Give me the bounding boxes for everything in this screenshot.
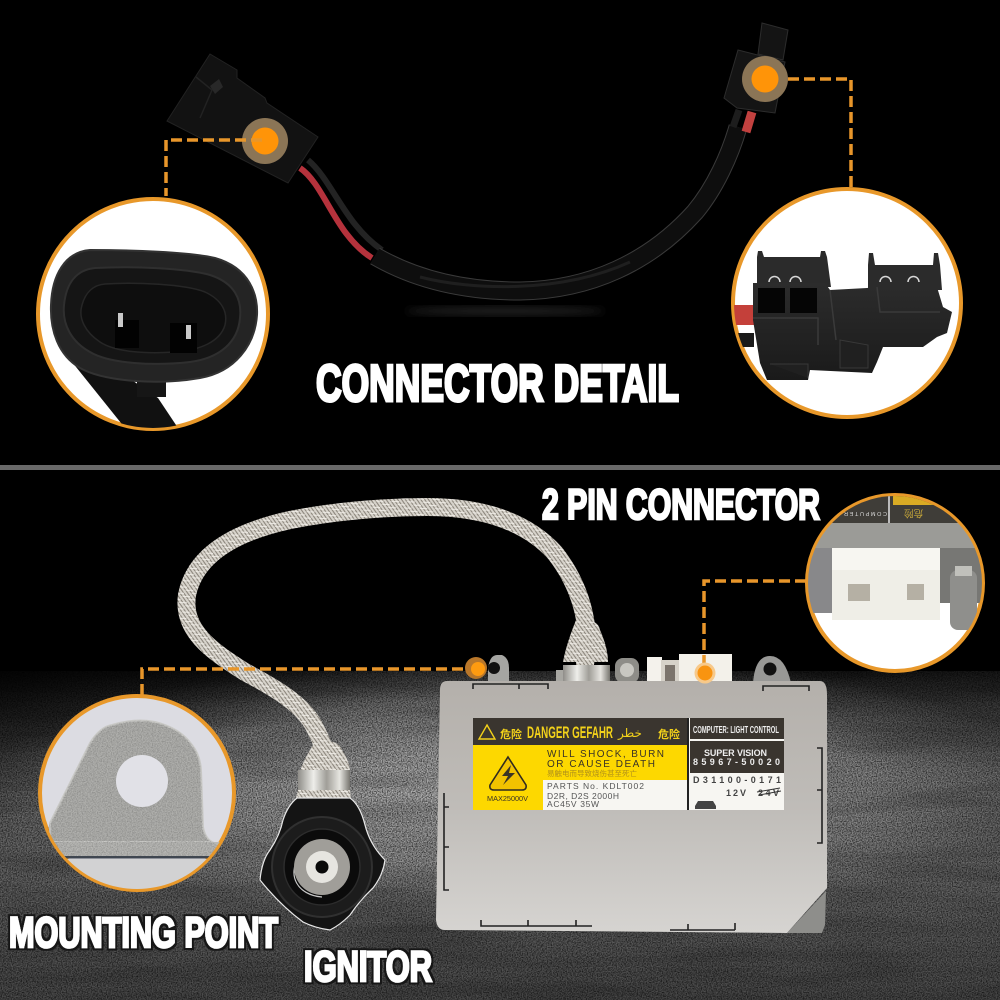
yellow warning label: 易触电而导致烧伤甚至死亡 <box>547 768 638 778</box>
cable sheath <box>375 127 738 291</box>
yellow warning label: AC45V 35W <box>547 799 599 809</box>
wiring harness <box>300 110 752 316</box>
yellow warning label: DANGER GEFAHR <box>527 723 613 742</box>
marker: right plug <box>742 56 788 102</box>
dashed leader: left plug <box>166 140 262 196</box>
braid ferrule <box>556 665 610 683</box>
marker: left plug <box>242 118 288 164</box>
yellow warning label: OR CAUSE DEATH <box>547 759 655 770</box>
label: 2 pin connector: 2 PIN CONNECTOR <box>542 481 820 529</box>
yellow warning label: خطر <box>617 726 642 741</box>
panel: floor background <box>0 671 1000 1000</box>
product label: COMPUTER: LIGHT CONTROL <box>693 725 779 736</box>
marker: mounting point <box>465 657 487 679</box>
white connector <box>647 654 732 683</box>
red wire right <box>746 112 752 132</box>
product label: D31100-0171 <box>693 775 781 785</box>
dashed leader: 2 pin connector <box>704 581 806 665</box>
label: mounting point: MOUNTING POINT <box>9 909 278 957</box>
cable glow <box>405 306 605 316</box>
dashed leader: right plug <box>788 79 851 187</box>
yellow warning label <box>473 718 689 810</box>
control module <box>436 654 827 933</box>
ignitor <box>260 770 385 930</box>
braided cable <box>186 507 608 772</box>
yellow warning label: 危险 <box>658 726 680 742</box>
ignitor braid collar <box>296 790 351 799</box>
divider band <box>0 465 1000 470</box>
yellow warning label: D2R, D2S 2000H <box>547 791 619 801</box>
ignitor ferrule <box>298 770 350 792</box>
plate slots <box>444 684 822 930</box>
right plug connector <box>724 23 788 113</box>
module plate <box>436 681 827 933</box>
callout: dual clip connector detail <box>730 189 961 417</box>
callout: 2 pin connector detail <box>800 490 990 671</box>
product label: SUPER VISION <box>704 748 767 758</box>
callout: mounting tab detail <box>40 696 240 899</box>
ignitor body <box>260 798 385 930</box>
left plug connector <box>167 54 318 183</box>
black wires <box>308 160 382 250</box>
mounting tabs <box>488 655 791 684</box>
product label: 12V <box>726 788 746 798</box>
title: connector detail: CONNECTOR DETAIL <box>316 355 679 413</box>
yellow warning label: 危险 <box>500 726 522 742</box>
callout: oval connector detail <box>38 199 268 429</box>
yellow warning label: PARTS No. KDLT002 <box>547 781 644 791</box>
yellow warning label: WILL SHOCK, BURN <box>547 749 664 760</box>
dashed leader: mounting point <box>142 669 470 695</box>
label: ignitor: IGNITOR <box>304 943 432 991</box>
product label: 85967-50020 <box>693 757 780 767</box>
marker: 2 pin connector <box>694 662 716 684</box>
product label: 24V <box>758 788 779 798</box>
callout: 2 pin connector detail: COMPUTER <box>844 510 887 516</box>
red wire <box>300 168 372 258</box>
yellow warning label: MAX25000V <box>487 796 528 803</box>
product label <box>689 718 784 810</box>
callout: 2 pin connector detail: 危险 <box>904 507 923 521</box>
